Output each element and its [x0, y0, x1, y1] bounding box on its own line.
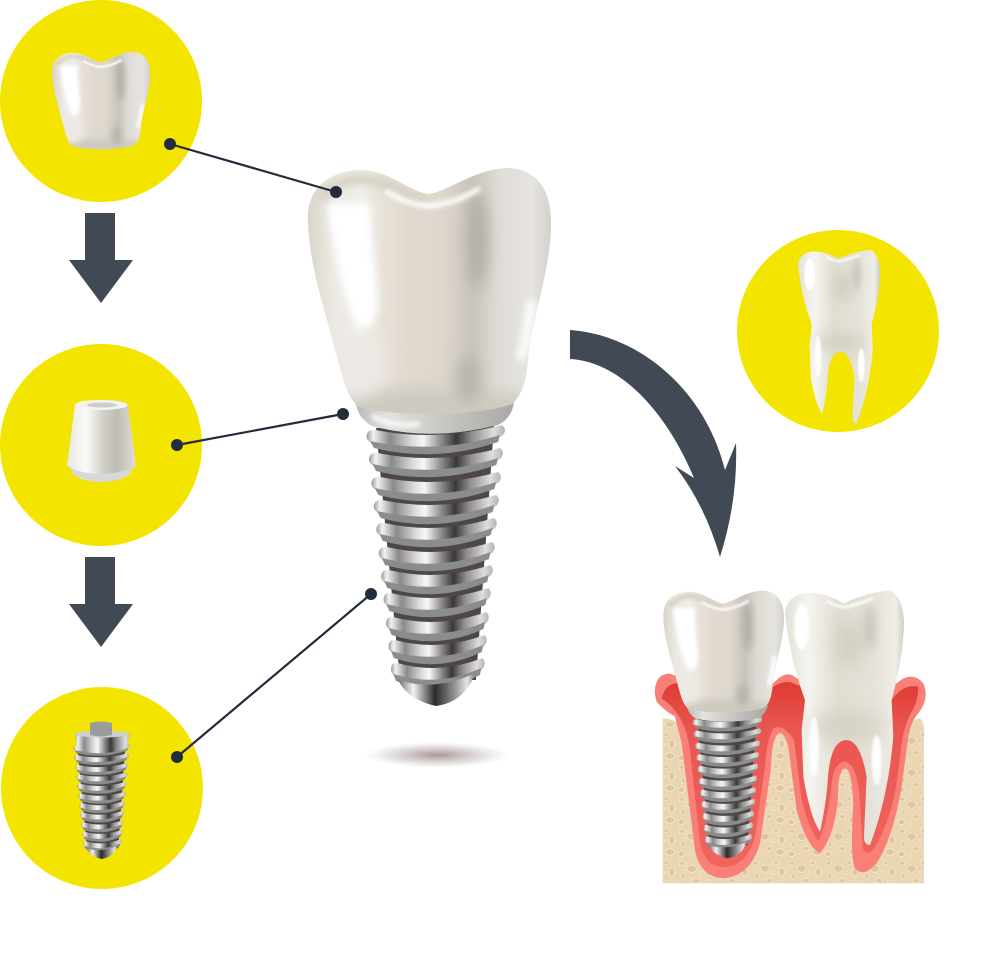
connector: crown [164, 138, 342, 198]
panel: abutment circle [0, 344, 202, 546]
icon: natural tooth [798, 250, 880, 423]
curved arrow [570, 330, 736, 557]
panel: crown circle [0, 0, 202, 202]
implanted crown [663, 591, 784, 721]
panel: screw circle [1, 687, 203, 889]
implanted screw [693, 717, 762, 858]
bone [663, 718, 924, 883]
scene: implant in jaw [655, 591, 926, 883]
main implant [308, 168, 551, 706]
icon: small abutment [67, 400, 136, 482]
natural tooth [785, 591, 904, 845]
implant screw [366, 425, 505, 706]
main crown [308, 168, 551, 432]
arrow: crown to abutment [69, 213, 133, 303]
connector: abutment [171, 408, 349, 451]
gum [655, 674, 926, 878]
arrow: abutment to screw [69, 557, 133, 647]
panel: natural tooth circle [737, 230, 939, 432]
shadow under implant [365, 742, 509, 768]
icon: small crown [52, 52, 150, 156]
icon: small screw [73, 722, 130, 859]
collar [687, 705, 768, 722]
abutment collar [356, 402, 514, 434]
connector: screw [171, 588, 377, 763]
